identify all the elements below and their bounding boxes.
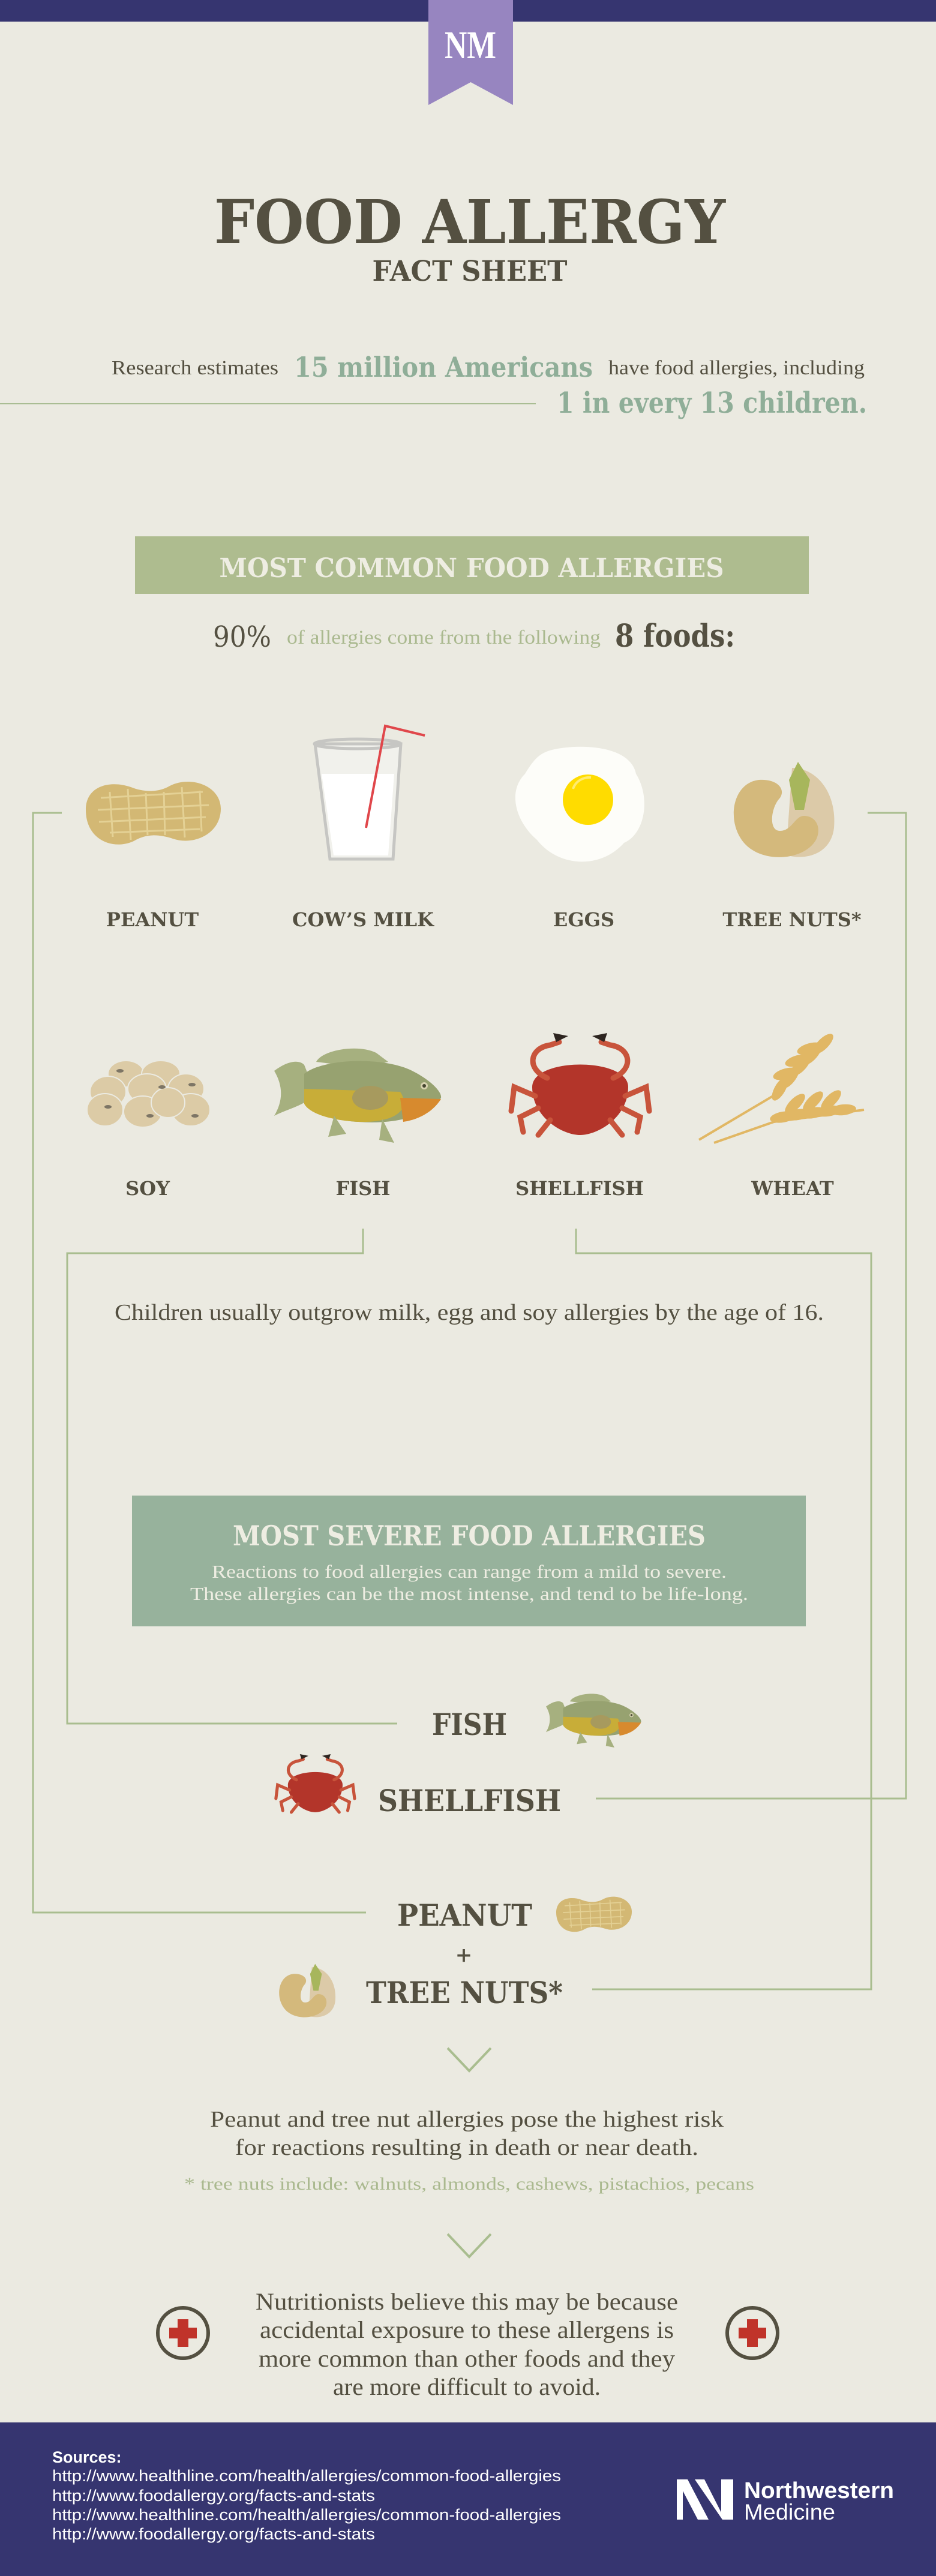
severe: peanut: PEANUT	[397, 1898, 532, 1933]
icon: medical cross right	[727, 2308, 778, 2358]
intro statistic: Research estimates	[112, 357, 278, 379]
labels row 2: FISH	[335, 1177, 391, 1200]
title	[214, 187, 727, 288]
footer	[0, 2422, 936, 2576]
icon: shellfish	[511, 1033, 649, 1135]
labels row 1: EGGS	[553, 908, 614, 931]
sources: http://www.healthline.com/health/allergies/common-food-allergies	[52, 2467, 561, 2485]
icon: fish	[274, 1049, 441, 1143]
banner: most severe food allergies: Reactions to food allergies can range from a mild to severe.	[212, 1561, 727, 1582]
severe: peanut	[397, 1897, 632, 1933]
90 percent statement: of allergies come from the following	[287, 627, 601, 648]
icon: wheat	[699, 1031, 864, 1143]
icon: peanut	[86, 782, 221, 845]
logo: Northwestern Medicine	[677, 2478, 894, 2524]
banner: most common food allergies: MOST COMMON FOOD ALLERGIES	[220, 553, 724, 584]
icon: tree nuts	[734, 762, 834, 857]
title: FOOD ALLERGY	[214, 187, 727, 257]
arrow: chevron 1	[448, 2048, 491, 2071]
bracket: inner right	[576, 1229, 871, 1989]
title: FACT SHEET	[372, 255, 568, 288]
text: highest risk	[210, 2107, 724, 2160]
labels row 1: PEANUT	[106, 908, 199, 931]
icon: medical cross left	[158, 2308, 208, 2358]
sources: http://www.healthline.com/health/allergies/common-food-allergies	[52, 2506, 561, 2524]
labels row 1: COW’S MILK	[292, 908, 434, 931]
banner: most severe food allergies: These allergies can be the most intense, and tend to be life-long.	[190, 1583, 748, 1604]
text: nutritionists: Nutritionists believe this may be because	[256, 2288, 678, 2315]
sources: http://www.foodallergy.org/facts-and-stats	[52, 2487, 375, 2505]
intro statistic: 1 in every 13 children.	[557, 386, 867, 420]
90 percent statement	[213, 618, 735, 654]
severe: tree nuts: TREE NUTS*	[366, 1975, 563, 2010]
logo: Northwestern Medicine: Medicine	[744, 2500, 835, 2524]
labels row 2: SHELLFISH	[515, 1177, 644, 1200]
arrow: chevron 2	[448, 2234, 491, 2257]
90 percent statement: 8 foods:	[615, 618, 735, 654]
severe: fish	[432, 1694, 641, 1748]
icon: soy	[87, 1061, 210, 1127]
banner: most common food allergies	[135, 536, 809, 594]
icon: cow's milk	[314, 726, 425, 859]
bracket: outer left	[33, 813, 366, 1913]
sources: http://www.foodallergy.org/facts-and-stats	[52, 2525, 375, 2543]
text: children outgrow: Children usually outgrow milk, egg and soy allergies by the age of 16.	[115, 1300, 824, 1325]
top bar	[0, 0, 936, 22]
severe: shellfish: SHELLFISH	[378, 1783, 561, 1818]
intro statistic	[0, 351, 867, 420]
text: nutritionists: are more difficult to avoid.	[333, 2373, 601, 2400]
text: nutritionists: accidental exposure to these allergens is	[260, 2316, 674, 2343]
labels row 2: SOY	[125, 1177, 170, 1200]
severe: shellfish	[276, 1754, 561, 1818]
text: nutritionists	[256, 2288, 678, 2400]
icon: egg	[515, 747, 644, 861]
banner: most severe food allergies: MOST SEVERE FOOD ALLERGIES	[233, 1520, 706, 1552]
plus sign: +	[455, 1943, 472, 1967]
labels row 1	[106, 908, 862, 931]
labels row 2	[125, 1177, 834, 1200]
intro statistic: 15 million Americans	[294, 351, 593, 383]
bracket: outer right	[596, 813, 906, 1799]
bracket: inner left	[67, 1229, 397, 1724]
banner: most severe food allergies	[132, 1496, 806, 1626]
text: highest risk: Peanut and tree nut allergies pose the highest risk	[210, 2107, 724, 2132]
text: nutritionists: more common than other foods and they	[259, 2345, 675, 2372]
intro statistic: have food allergies, including	[608, 357, 865, 379]
sources: Sources:	[52, 2448, 122, 2466]
text: highest risk: for reactions resulting in death or near death.	[235, 2135, 698, 2160]
labels row 2: WHEAT	[751, 1177, 834, 1200]
severe: tree nuts	[279, 1964, 563, 2017]
logo ribbon: NM	[445, 23, 496, 67]
labels row 1: TREE NUTS*	[722, 908, 862, 931]
note: tree nuts include: * tree nuts include: walnuts, almonds, cashews, pistachios, pecans	[184, 2174, 754, 2194]
logo: Northwestern Medicine: Northwestern	[744, 2478, 894, 2503]
severe: fish: FISH	[432, 1707, 507, 1742]
sources	[52, 2448, 561, 2543]
logo ribbon	[428, 0, 513, 105]
90 percent statement: 90%	[213, 620, 271, 654]
